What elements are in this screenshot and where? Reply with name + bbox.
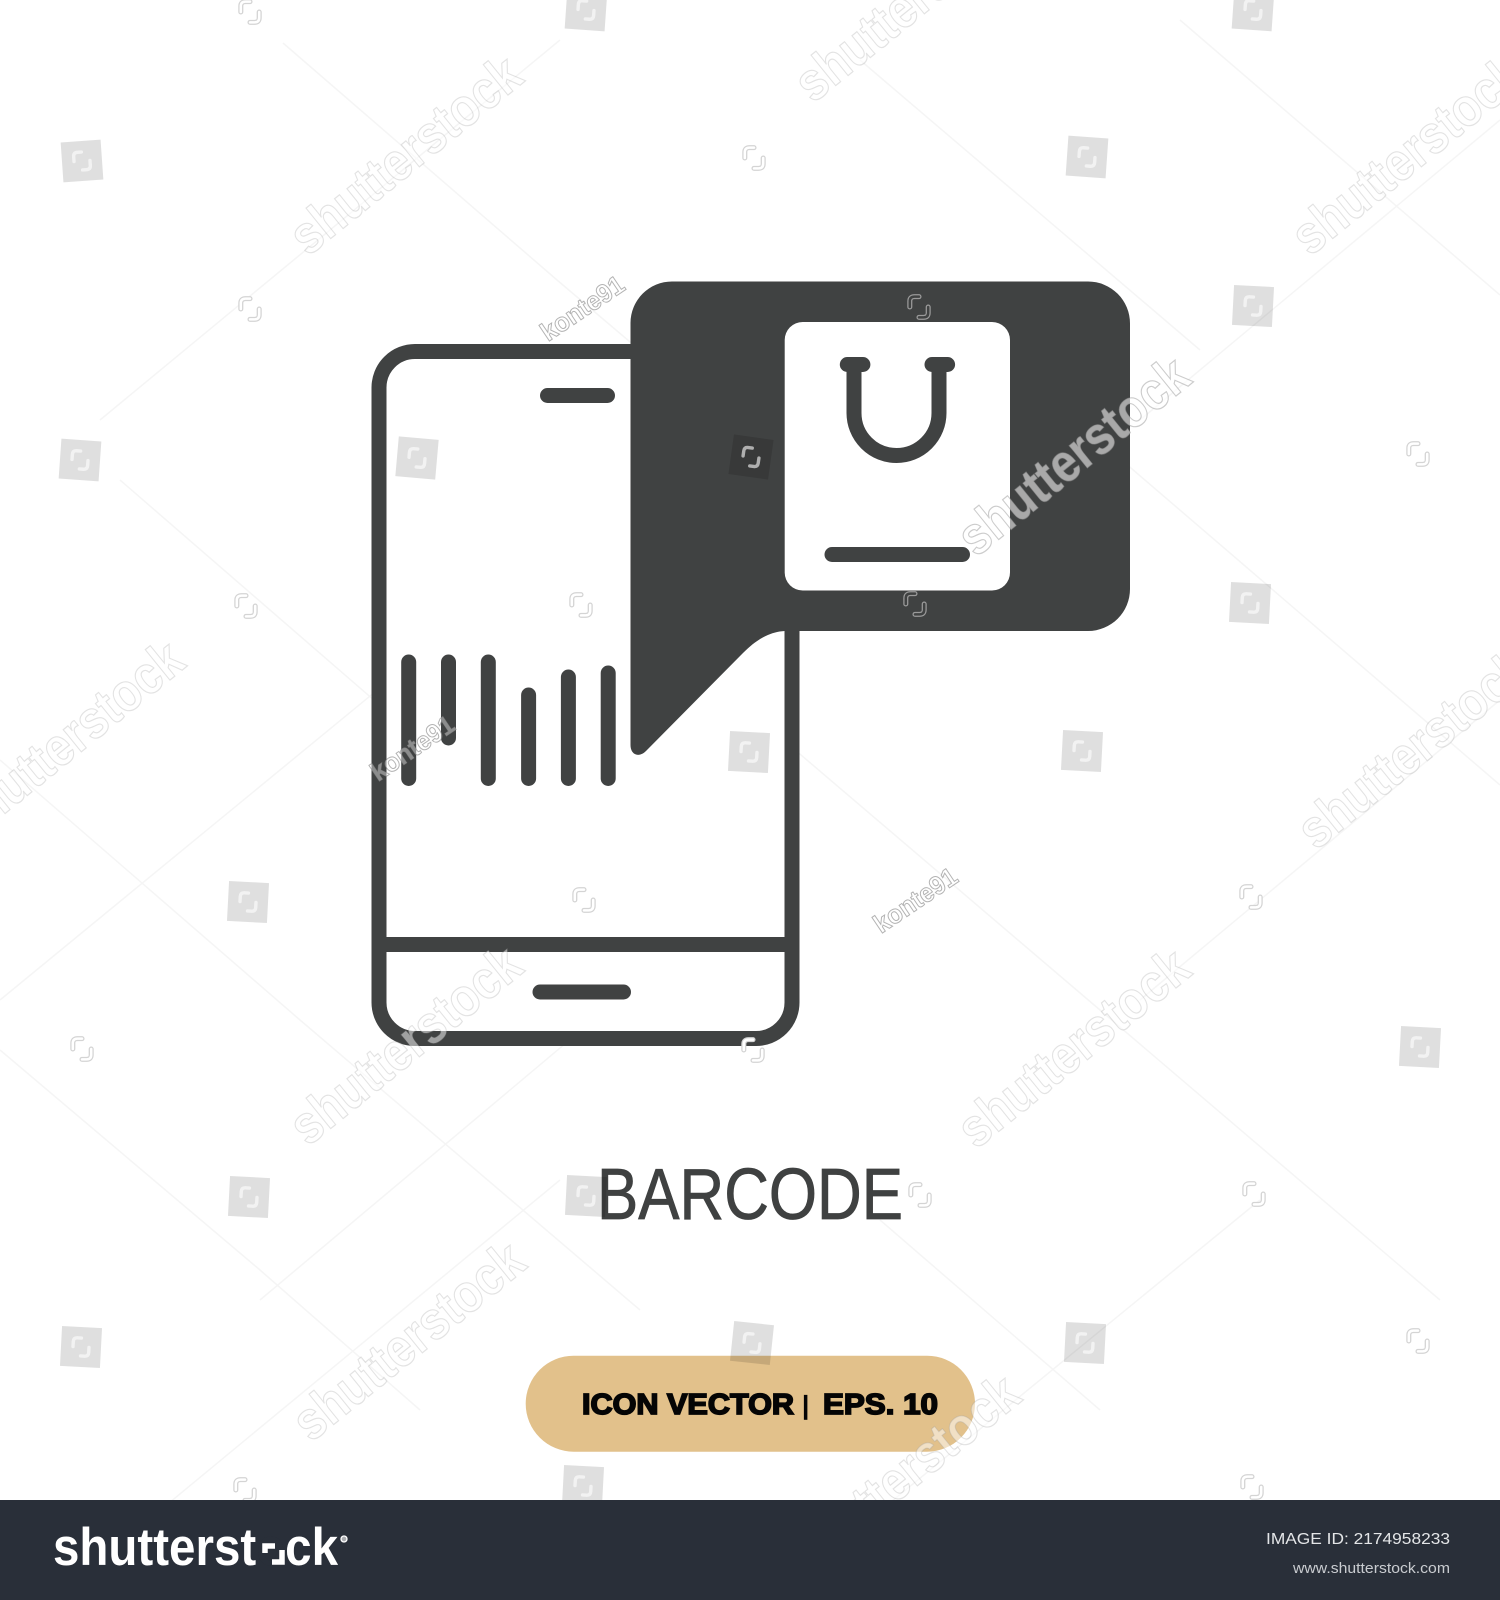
watermark contributor text: konte91 [868, 861, 963, 939]
icon: smartphone with shopping bubble [379, 282, 1130, 1038]
title: BARCODE: BARCODE [597, 1155, 903, 1235]
phone speaker [540, 388, 615, 403]
phone divider [379, 937, 792, 952]
badge pill [526, 1356, 975, 1452]
badge text: | [802, 1390, 809, 1420]
barcode bars [401, 654, 616, 786]
watermark shutterstock text: shutterstock [278, 933, 534, 1156]
phone body [379, 352, 792, 1038]
footer bar [0, 1500, 1500, 1600]
watermark contributor text: konte91 [365, 709, 460, 787]
badge: icon vector eps 10 [526, 1356, 975, 1452]
bag handle [854, 365, 939, 456]
watermark contributor text: konte91 [535, 269, 630, 347]
handle caps [840, 357, 955, 372]
watermark contributor text [365, 269, 963, 939]
watermark shutterstock text: shutterstock [946, 344, 1202, 567]
badge text: ICON VECTOR [582, 1389, 794, 1421]
website url: www.shutterstock.com [1292, 1561, 1450, 1577]
watermark shutterstock text: shutterstock [278, 43, 534, 266]
badge text [582, 1389, 938, 1421]
bag label line [824, 547, 970, 562]
watermark shutterstock text: shutterstock [946, 936, 1202, 1159]
badge text: EPS. 10 [823, 1389, 938, 1421]
watermark shutterstock text: shutterstock [776, 1362, 1032, 1585]
shutterstock logo: shutterstock [53, 1518, 338, 1577]
watermark shutterstock text: shutterstock [281, 1229, 537, 1452]
speech bubble [630, 282, 1130, 755]
bag body [785, 322, 1010, 590]
phone home button [532, 984, 631, 1000]
image id: IMAGE ID: 2174958233 [1266, 1531, 1450, 1548]
shopping bag card [785, 322, 1010, 590]
